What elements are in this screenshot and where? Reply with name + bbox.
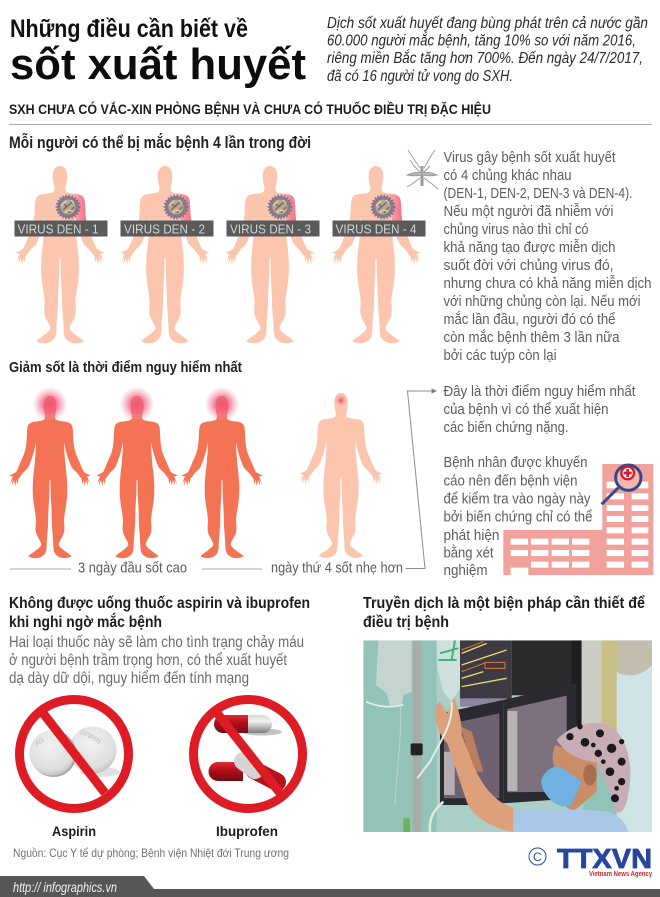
text: drug warning <box>9 634 304 687</box>
text: virus explanation: mắc lần đầu, người đó có thể <box>444 311 616 328</box>
body: day 3 <box>181 387 263 558</box>
text: danger explanation: Bệnh nhân được khuyến <box>444 454 588 471</box>
text: drug warning: dạ dày dữ dội, nguy hiểm đến tính mạng <box>9 669 249 687</box>
section heading: four infections: Mỗi người có thể bị mắc bệnh 4 lần trong đời <box>9 133 311 152</box>
heading: no aspirin: khi nghi ngờ mắc bệnh <box>9 612 162 631</box>
label: aspirin: Aspirin <box>52 823 96 839</box>
footer bar <box>0 876 660 897</box>
source note: Nguồn: Cục Y tế dự phòng; Bệnh viện Nhiệt đới Trung ương <box>13 846 289 860</box>
text: virus explanation: chủng virus nào thì chỉ có <box>444 221 588 238</box>
icon: mosquito <box>407 150 438 189</box>
text: virus explanation <box>444 149 652 364</box>
label: ibuprofen: Ibuprofen <box>216 823 278 839</box>
caption: first three days: 3 ngày đầu sốt cao <box>78 560 187 576</box>
label: VIRUS DEN-3: VIRUS DEN - 3 <box>230 222 311 236</box>
body: DEN-3 <box>226 166 314 343</box>
body: day 1 <box>9 387 91 558</box>
icon: no aspirin: SPIRIN <box>78 729 102 746</box>
icon: no aspirin <box>20 700 128 808</box>
text: danger explanation: cáo nên đến bệnh viện <box>444 472 578 490</box>
logo: TTXVN: TTXVN <box>557 843 652 874</box>
text: drug warning: ở người bệnh trầm trọng hơn, có thể xuất huyết <box>9 651 287 669</box>
title: sốt xuất huyết <box>10 40 306 89</box>
photo: nurse adjusting IV drip <box>363 640 652 832</box>
label: VIRUS DEN-2: VIRUS DEN - 2 <box>124 222 205 236</box>
subheading: SXH CHƯA CÓ VẮC-XIN PHÒNG BỆNH VÀ CHƯA CÓ THUỐC ĐIỀU TRỊ ĐẶC HIỆU <box>9 100 491 117</box>
intro paragraph: đã có 16 người tử vong do SXH. <box>327 68 513 85</box>
text: danger explanation: phát hiện <box>444 527 500 544</box>
section heading: fever drop: Giảm sốt là thời điểm nguy hiểm nhất <box>9 359 242 376</box>
text: virus explanation: Virus gây bệnh sốt xuất huyết <box>444 149 616 166</box>
text: virus explanation: suốt đời với chủng virus đó, <box>444 257 614 274</box>
body: DEN-2 <box>120 166 210 343</box>
text: virus explanation: có 4 chủng khác nhau <box>444 167 572 184</box>
heading: no aspirin: Không được uống thuốc aspirin và ibuprofen <box>9 595 310 612</box>
logo: TTXVN <box>529 843 652 878</box>
arrow: connector to explanation <box>406 389 436 568</box>
icon: no aspirin: AS <box>34 736 46 748</box>
body: day 2 <box>96 387 178 558</box>
title: Những điều cần biết về <box>10 15 248 43</box>
text: danger explanation: của bệnh vì có thể xuất hiện <box>444 401 608 418</box>
text: danger explanation: bằng xét <box>444 544 494 562</box>
intro paragraph <box>327 15 648 85</box>
panel: four virus bodies <box>14 166 426 343</box>
heading: infusion: điều trị bệnh <box>363 614 449 631</box>
caption: fourth day: ngày thứ 4 sốt nhẹ hơn <box>271 560 403 576</box>
text: danger explanation <box>444 383 636 579</box>
label: VIRUS DEN-4: VIRUS DEN - 4 <box>336 222 416 236</box>
body: DEN-1 <box>16 166 104 343</box>
text: danger explanation: các biến chứng nặng. <box>444 419 568 436</box>
panel: fever bodies <box>9 387 382 558</box>
footer bar: http:// infographics.vn <box>13 879 117 895</box>
icon: hospital with magnifier <box>503 464 653 575</box>
text: drug warning: Hai loại thuốc này sẽ làm cho tình trạng chảy máu <box>9 634 304 651</box>
label: VIRUS DEN-1: VIRUS DEN - 1 <box>18 222 98 236</box>
text: virus explanation: Nếu một người đã nhiễm với <box>444 203 614 220</box>
body: day 4 <box>300 393 382 558</box>
heading: infusion <box>363 594 645 631</box>
text: danger explanation: Đây là thời điểm nguy hiểm nhất <box>444 383 636 400</box>
logo: TTXVN: C <box>533 850 542 864</box>
icon: no ibuprofen <box>194 700 302 808</box>
text: danger explanation: bởi biến chứng chỉ có thể <box>444 508 592 526</box>
title <box>10 15 306 89</box>
text: virus explanation: còn mắc bệnh thêm 3 lần nữa <box>444 329 620 346</box>
body: DEN-4 <box>332 166 420 343</box>
text: virus explanation: khả năng tạo được miễn dịch <box>444 239 616 256</box>
text: danger explanation: nghiệm <box>444 562 488 579</box>
text: virus explanation: bởi các tuýp còn lại <box>444 347 556 364</box>
heading: no aspirin <box>9 595 310 631</box>
text: danger explanation: để kiểm tra vào ngày này <box>444 490 591 508</box>
